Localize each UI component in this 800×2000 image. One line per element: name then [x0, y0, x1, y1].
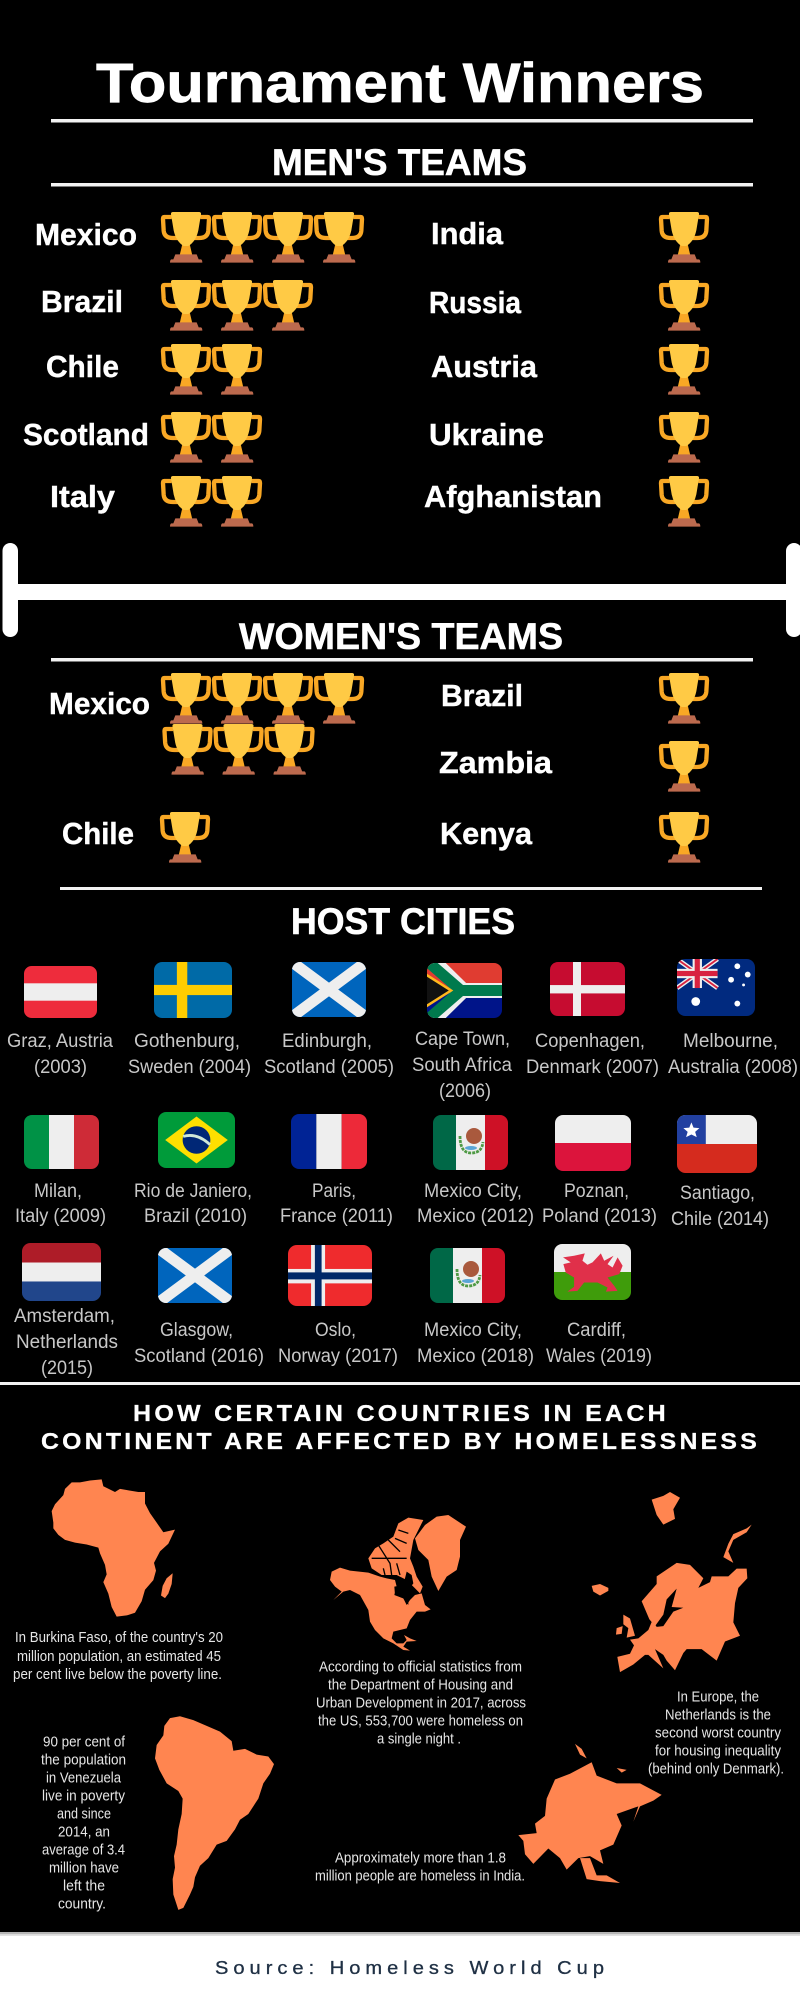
- host: Amsterdam: (2015): [41, 1358, 93, 1379]
- text: North America: the US, 553,700 were homeless on: [318, 1714, 523, 1730]
- text: Asia: Approximately more than 1.8: [335, 1850, 506, 1866]
- panel: men's teams: [23, 212, 707, 527]
- row: Brazil 1 trophy: Brazil: [441, 678, 523, 713]
- host: Edinburgh: Edinburgh,: [282, 1031, 372, 1052]
- source credit: Source: Homeless World Cup: [215, 1958, 609, 1978]
- section divider bar: [2, 543, 800, 637]
- panel: South America: [41, 1716, 274, 1912]
- host: Mexico City 2018: [417, 1248, 534, 1367]
- host: Santiago: [671, 1115, 769, 1230]
- text: Europe: (behind only Denmark).: [648, 1762, 784, 1778]
- host: Melbourne: [668, 959, 798, 1078]
- row: India 1 trophy: [431, 212, 707, 263]
- host: Copenhagen: Copenhagen,: [535, 1031, 645, 1052]
- row: Russia 1 trophy: [429, 280, 707, 331]
- host: Poznan: Poznan,: [564, 1181, 629, 1202]
- row: Ukraine 1 trophy: [429, 412, 707, 463]
- row: Mexico 4 trophies: [35, 212, 362, 263]
- host: Gothenburg: Gothenburg,: [134, 1031, 240, 1052]
- footer band: [0, 1932, 800, 2000]
- host: Amsterdam: Amsterdam,: [14, 1306, 115, 1327]
- host: Santiago: Santiago,: [680, 1183, 755, 1204]
- panel: Asia: [315, 1744, 662, 1884]
- row: Zambia 1 trophy: Zambia: [439, 745, 553, 780]
- text: Africa: million population, an estimated 45: [17, 1649, 221, 1665]
- host: Poznan: [542, 1115, 657, 1227]
- host: Melbourne: Melbourne,: [683, 1031, 778, 1052]
- host: Mexico City 2012: Mexico (2012): [417, 1206, 534, 1227]
- text: Asia: [315, 1850, 525, 1884]
- host: Rio de Janiero: Brazil (2010): [144, 1206, 247, 1227]
- map: Africa: [52, 1479, 175, 1617]
- host: Cardiff: [546, 1244, 652, 1367]
- host: Cardiff: Cardiff,: [567, 1320, 626, 1341]
- heading: women's teams: WOMEN'S TEAMS: [239, 616, 563, 657]
- text: South America: left the: [63, 1878, 105, 1894]
- text: North America: the Department of Housing and: [328, 1678, 513, 1694]
- host: Graz: (2003): [34, 1057, 87, 1078]
- host: Graz: Graz, Austria: [7, 1031, 113, 1052]
- text: South America: 2014, an: [58, 1824, 110, 1840]
- row: Kenya 1 trophy: [440, 812, 707, 863]
- text: North America: Urban Development in 2017, across: [316, 1696, 526, 1712]
- text: South America: average of 3.4: [42, 1842, 125, 1858]
- row: Brazil 3 trophies: Brazil: [41, 284, 123, 319]
- host: Edinburgh: Scotland (2005): [264, 1057, 394, 1078]
- text: North America: [316, 1660, 526, 1748]
- host: Cape Town: (2006): [439, 1081, 491, 1102]
- text: South America: the population: [41, 1752, 126, 1768]
- panel: host cities: [7, 959, 798, 1379]
- row: Ukraine 1 trophy: Ukraine: [429, 417, 544, 452]
- text: Asia: million people are homeless in India.: [315, 1868, 525, 1884]
- map: Europe: [592, 1492, 752, 1672]
- host: Edinburgh: [264, 962, 394, 1078]
- text: Europe: [648, 1690, 784, 1778]
- title: [51, 51, 753, 122]
- host: Oslo: [278, 1245, 398, 1367]
- row: Italy 2 trophies: [50, 476, 260, 527]
- host: Melbourne: Australia (2008): [668, 1057, 798, 1078]
- heading: women's teams: [51, 616, 753, 662]
- row: Mexico 7 trophies: [49, 673, 362, 775]
- host: Mexico City 2012: Mexico City,: [424, 1181, 522, 1202]
- host: Glasgow: [134, 1248, 264, 1367]
- row: Austria 1 trophy: Austria: [431, 349, 538, 384]
- panel: Europe: [592, 1492, 784, 1778]
- host: Rio de Janiero: [134, 1112, 252, 1227]
- map: South America: [155, 1716, 274, 1910]
- host: Mexico City 2012: [417, 1115, 534, 1227]
- text: South America: country.: [58, 1896, 106, 1912]
- row: Scotland 2 trophies: [23, 412, 260, 463]
- host: Oslo: Oslo,: [315, 1320, 356, 1341]
- heading: homelessness: HOW CERTAIN COUNTRIES IN EACH: [133, 1400, 669, 1426]
- host: Copenhagen: Denmark (2007): [526, 1057, 659, 1078]
- panel: women's teams: [49, 673, 707, 863]
- text: South America: 90 per cent of: [43, 1734, 126, 1750]
- text: Europe: for housing inequality: [655, 1744, 782, 1760]
- host: Gothenburg: Sweden (2004): [128, 1057, 251, 1078]
- heading: men's teams: [51, 142, 753, 186]
- host: Milan: Italy (2009): [15, 1206, 106, 1227]
- row: Italy 2 trophies: Italy: [50, 479, 116, 514]
- text: North America: a single night .: [377, 1732, 461, 1748]
- host: Cape Town: [412, 959, 512, 1102]
- row: India 1 trophy: India: [431, 216, 504, 251]
- text: North America: According to official statistics from: [319, 1660, 522, 1676]
- row: Chile 1 trophy: Chile: [62, 816, 134, 851]
- text: Europe: In Europe, the: [677, 1690, 759, 1706]
- title: Tournament Winners: [96, 51, 704, 114]
- host: Cape Town: South Africa: [412, 1055, 512, 1076]
- host: Paris: [280, 1114, 393, 1227]
- host: Cape Town: Cape Town,: [415, 1029, 510, 1050]
- text: Europe: second worst country: [655, 1726, 782, 1742]
- host: Rio de Janiero: Rio de Janiero,: [134, 1181, 252, 1202]
- host: Glasgow: Glasgow,: [160, 1320, 233, 1341]
- text: South America: in Venezuela: [46, 1770, 122, 1786]
- row: Brazil 1 trophy: [441, 673, 707, 724]
- text: South America: live in poverty: [42, 1788, 126, 1804]
- row: Brazil 3 trophies: [41, 280, 311, 331]
- host: Poznan: Poland (2013): [542, 1206, 657, 1227]
- row: Chile 1 trophy: [62, 812, 208, 863]
- panel: North America: [316, 1515, 526, 1748]
- host: Amsterdam: [14, 1243, 118, 1379]
- text: Africa: [13, 1630, 223, 1683]
- row: Chile 2 trophies: Chile: [46, 349, 119, 384]
- host: Mexico City 2018: Mexico (2018): [417, 1346, 534, 1367]
- host: Mexico City 2018: Mexico City,: [424, 1320, 522, 1341]
- row: Scotland 2 trophies: Scotland: [23, 417, 149, 452]
- row: Afghanistan 1 trophy: Afghanistan: [424, 479, 602, 514]
- host: Paris: France (2011): [280, 1206, 393, 1227]
- row: Mexico 4 trophies: Mexico: [35, 217, 137, 252]
- map: North America: [330, 1515, 466, 1651]
- row: Chile 2 trophies: [46, 344, 260, 395]
- heading: host cities: HOST CITIES: [291, 901, 515, 942]
- host: Copenhagen: [526, 962, 659, 1078]
- host: Glasgow: Scotland (2016): [134, 1346, 264, 1367]
- host: Paris: Paris,: [312, 1181, 356, 1202]
- row: Zambia 1 trophy: [439, 741, 707, 792]
- row: Kenya 1 trophy: Kenya: [440, 816, 533, 851]
- host: Milan: Milan,: [34, 1181, 82, 1202]
- text: Africa: per cent live below the poverty line.: [13, 1667, 222, 1683]
- row: Mexico 7 trophies: Mexico: [49, 686, 150, 721]
- panel: Africa: [13, 1479, 223, 1683]
- host: Amsterdam: Netherlands: [16, 1332, 118, 1353]
- heading: men's teams: MEN'S TEAMS: [272, 142, 527, 183]
- text: Africa: In Burkina Faso, of the country's 20: [15, 1630, 223, 1646]
- host: Cardiff: Wales (2019): [546, 1346, 652, 1367]
- row: Austria 1 trophy: [431, 344, 707, 395]
- map: Asia: [518, 1744, 662, 1883]
- text: South America: million have: [49, 1860, 119, 1876]
- row: Afghanistan 1 trophy: [424, 476, 707, 527]
- heading: homelessness: [41, 1400, 760, 1454]
- text: Europe: Netherlands is the: [665, 1708, 771, 1724]
- host: Graz: [7, 966, 113, 1078]
- host: Gothenburg: [128, 962, 251, 1078]
- host: Oslo: Norway (2017): [278, 1346, 398, 1367]
- host: Milan: [15, 1115, 106, 1227]
- heading: homelessness: CONTINENT ARE AFFECTED BY HOMELESSNESS: [41, 1428, 760, 1454]
- row: Russia 1 trophy: Russia: [429, 285, 522, 320]
- text: South America: and since: [57, 1806, 111, 1822]
- host: Santiago: Chile (2014): [671, 1209, 769, 1230]
- text: South America: [41, 1734, 126, 1912]
